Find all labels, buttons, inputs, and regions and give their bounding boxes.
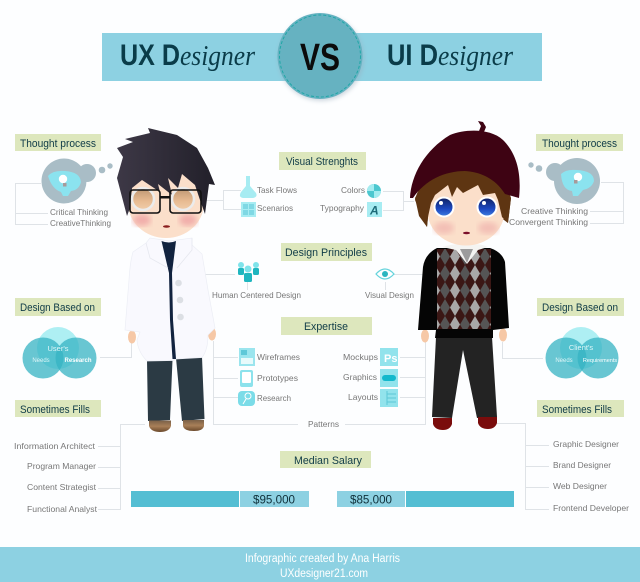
back hair bbox=[415, 170, 511, 227]
heading: Expertise bbox=[304, 321, 348, 333]
heading: Median Salary bbox=[294, 455, 362, 467]
panel: expertise bbox=[238, 317, 398, 429]
heading: Design Principles bbox=[285, 247, 367, 259]
labels: Creative Thinking bbox=[521, 206, 588, 216]
icon: thought bubble bbox=[42, 158, 113, 204]
panel: design based on left bbox=[15, 298, 101, 378]
footer: UXdesigner21.com bbox=[280, 568, 368, 580]
heading bbox=[280, 451, 371, 468]
labels bbox=[509, 206, 588, 227]
panel: median salary bbox=[131, 451, 514, 507]
icon: typography bbox=[367, 202, 382, 218]
labels: Critical Thinking bbox=[50, 207, 108, 217]
heading: Design Based on bbox=[542, 302, 618, 314]
mockups label: Mockups bbox=[343, 352, 378, 362]
venn diagram: Needs bbox=[32, 358, 50, 364]
role list: Brand Designer bbox=[553, 460, 611, 470]
role list: Program Manager bbox=[27, 461, 96, 471]
UI Designer title: UI D bbox=[387, 39, 438, 72]
typography label: Typography bbox=[320, 203, 365, 213]
labels bbox=[50, 207, 111, 228]
trousers bbox=[147, 357, 204, 421]
title banner bbox=[102, 13, 542, 101]
UI Designer title bbox=[387, 39, 513, 72]
heading bbox=[279, 152, 366, 170]
hands bbox=[128, 328, 216, 344]
character: UI designer bbox=[410, 121, 520, 430]
glasses bbox=[130, 190, 201, 213]
labels: CreativeThinking bbox=[50, 218, 111, 228]
icon: typography: A bbox=[369, 204, 379, 218]
head bbox=[428, 176, 504, 246]
panel: design principles bbox=[212, 243, 414, 300]
bar: UI salary bbox=[337, 491, 514, 507]
venn diagram bbox=[546, 327, 618, 378]
venn diagram: Requirements bbox=[583, 358, 617, 364]
heading: Sometimes Fills bbox=[20, 404, 90, 416]
colors label: Colors bbox=[341, 185, 365, 195]
lab coat bbox=[125, 238, 215, 361]
icon: research bbox=[238, 391, 255, 406]
UI Designer title: esigner bbox=[438, 41, 513, 72]
icon: photoshop: Ps bbox=[384, 353, 397, 365]
heading: Design Based on bbox=[20, 302, 95, 314]
bar: UX salary bbox=[131, 491, 309, 507]
heading bbox=[281, 243, 372, 261]
icon: layouts bbox=[380, 389, 398, 407]
heading: Thought process bbox=[542, 138, 617, 150]
graphics label: Graphics bbox=[343, 372, 377, 382]
head bbox=[128, 168, 204, 238]
collar bbox=[442, 244, 488, 264]
icon: thought bubble bbox=[528, 158, 600, 204]
connector lines bbox=[16, 182, 624, 510]
prototypes label: Prototypes bbox=[257, 373, 298, 383]
venn diagram bbox=[22, 327, 96, 378]
venn diagram: Client's bbox=[569, 343, 593, 352]
UX Designer title bbox=[120, 39, 255, 72]
role list: Functional Analyst bbox=[27, 504, 98, 514]
panel: visual strengths bbox=[240, 152, 382, 218]
footer bbox=[0, 547, 640, 582]
panel: design based on right bbox=[537, 298, 624, 378]
heading: Sometimes Fills bbox=[542, 404, 612, 416]
beret bbox=[410, 121, 520, 198]
fringe bbox=[415, 171, 511, 227]
labels: Convergent Thinking bbox=[509, 217, 588, 227]
panel: thought process left bbox=[15, 134, 113, 228]
panel: sometimes fills right bbox=[537, 400, 629, 513]
heading: Thought process bbox=[20, 138, 96, 150]
role list: Content Strategist bbox=[27, 482, 97, 492]
panel: sometimes fills left bbox=[14, 400, 101, 514]
visual design label: Visual Design bbox=[365, 290, 414, 300]
trousers bbox=[432, 337, 497, 418]
research label: Research bbox=[257, 393, 291, 403]
icon: colors bbox=[367, 184, 381, 198]
UX Designer title: UX D bbox=[120, 39, 180, 72]
wireframes label: Wireframes bbox=[257, 352, 300, 362]
icon: photoshop bbox=[380, 348, 398, 366]
layouts label: Layouts bbox=[348, 392, 378, 402]
heading bbox=[281, 317, 372, 335]
character: UX designer bbox=[117, 128, 216, 432]
icon: flask bbox=[240, 176, 257, 198]
role list: Frontend Developer bbox=[553, 503, 629, 513]
venn diagram: User's bbox=[47, 344, 69, 353]
sweater bbox=[418, 248, 509, 338]
icon: people bbox=[238, 262, 259, 282]
argyle vest bbox=[437, 249, 491, 329]
collar bbox=[146, 238, 192, 268]
hair bbox=[117, 128, 215, 216]
shoes bbox=[433, 417, 497, 430]
bar: UI salary: $85,000 bbox=[350, 492, 392, 506]
heading: Visual Strenghts bbox=[286, 156, 358, 168]
task flows label: Task Flows bbox=[257, 185, 297, 195]
UX Designer title: esigner bbox=[180, 41, 255, 72]
role list bbox=[553, 439, 629, 513]
panel: thought process right bbox=[509, 134, 623, 227]
hands bbox=[421, 328, 507, 342]
footer: Infographic created by Ana Harris bbox=[245, 553, 400, 565]
role list: Web Designer bbox=[553, 481, 607, 491]
shoes bbox=[149, 420, 204, 432]
icon: eye bbox=[376, 269, 394, 279]
venn diagram: Research bbox=[64, 358, 92, 364]
venn diagram: Needs bbox=[555, 358, 573, 364]
human centered design label: Human Centered Design bbox=[212, 290, 301, 300]
eyes bbox=[434, 198, 454, 216]
VS label: VS bbox=[300, 37, 340, 79]
icon: prototypes bbox=[240, 370, 253, 387]
role list: Graphic Designer bbox=[553, 439, 619, 449]
role list bbox=[14, 441, 98, 514]
icon: graphics bbox=[380, 369, 398, 387]
bar: UX salary: $95,000 bbox=[253, 492, 295, 506]
icon: scenarios bbox=[241, 202, 256, 217]
buttons bbox=[175, 280, 184, 320]
inner shirt bbox=[162, 241, 176, 359]
eyes bbox=[132, 188, 154, 210]
patterns label: Patterns bbox=[308, 419, 339, 429]
scenarios label: Scenarios bbox=[257, 203, 293, 213]
role list: Information Architect bbox=[14, 441, 96, 451]
icon: wireframes bbox=[239, 348, 255, 366]
